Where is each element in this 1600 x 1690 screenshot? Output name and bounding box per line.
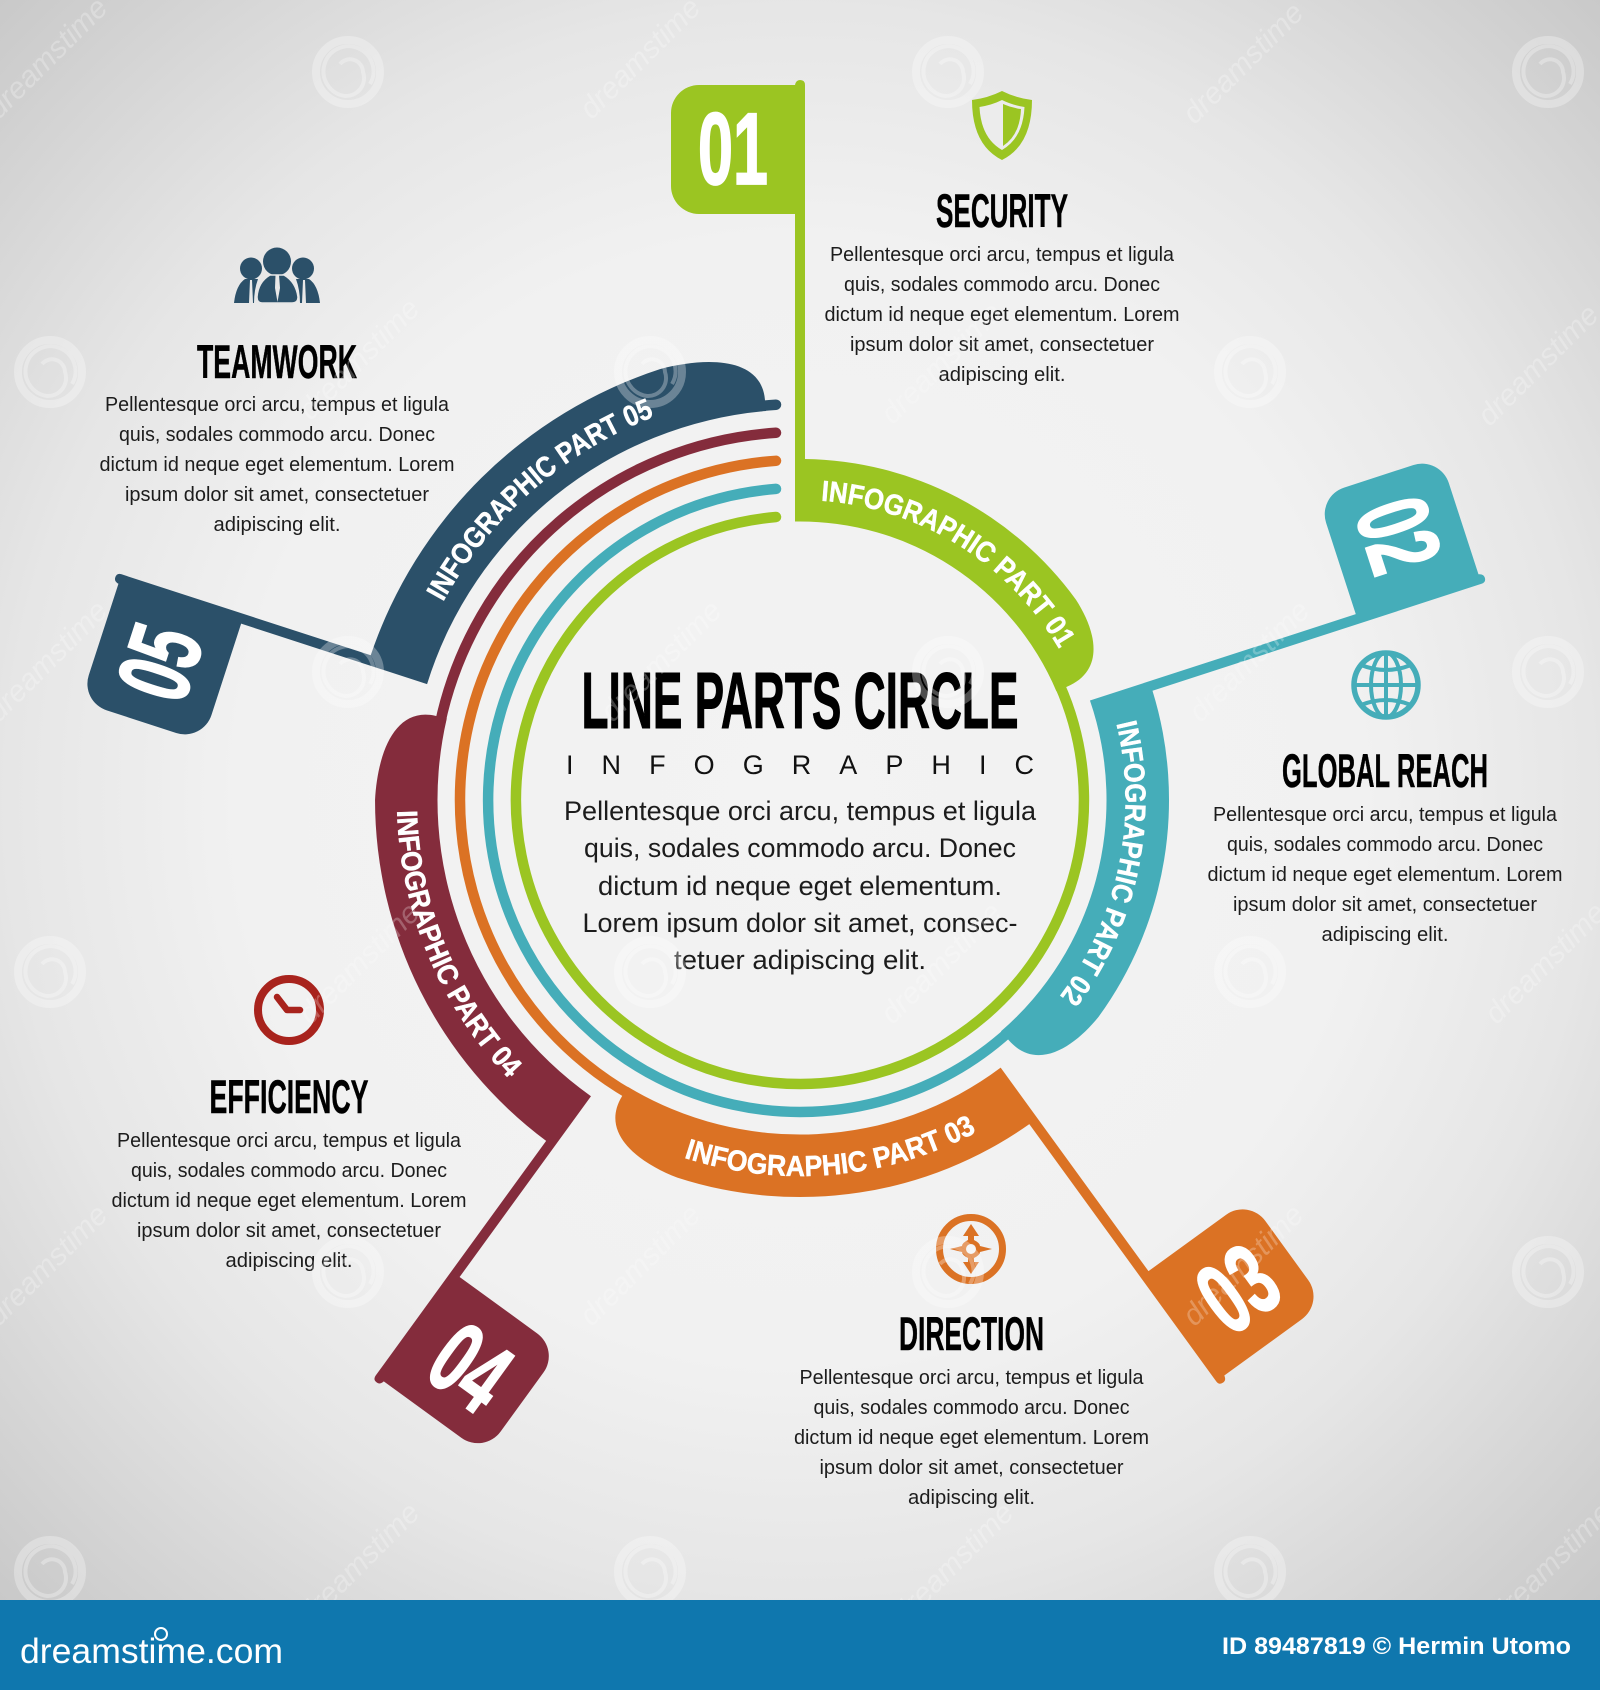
text: global reach body: Pellentesque orci arcu, tempus et ligula — [1213, 804, 1558, 826]
watermark text: dreamstime — [594, 594, 728, 728]
flag and arc band 02 — [874, 455, 1583, 1066]
text: security body — [824, 244, 1180, 386]
text: central body — [564, 796, 1037, 975]
icon: shield — [972, 91, 1032, 160]
panel: part 01 security — [671, 80, 1180, 692]
text: efficiency body: adipiscing elit. — [226, 1250, 352, 1272]
icon: team — [234, 248, 320, 303]
text: direction body: dictum id neque eget elementum. Lorem — [794, 1427, 1149, 1449]
heading: direction: DIRECTION — [899, 1307, 1044, 1360]
concentric ring lines — [440, 405, 1084, 1112]
text: central body: tetuer adipiscing elit. — [674, 945, 926, 975]
text: teamwork body: ipsum dolor sit amet, consectetuer — [125, 484, 429, 506]
flag and arc band 03 — [599, 830, 1328, 1584]
panel: part 04 efficiency — [112, 714, 591, 1444]
icon: compass — [940, 1218, 1002, 1280]
text: global reach body: ipsum dolor sit amet, consectetuer — [1233, 894, 1537, 916]
watermark text: dreamstime — [874, 896, 1008, 1030]
watermark text: dreamstime — [1176, 1198, 1310, 1332]
text: teamwork body — [100, 394, 454, 536]
ring: teal — [488, 489, 1009, 1112]
panel: part 05 teamwork — [87, 248, 766, 734]
ring: orange — [460, 461, 776, 1094]
panel: part 03 direction — [615, 1068, 1314, 1509]
footer logo: dreamstime.com — [20, 1632, 283, 1671]
icon: clock — [258, 979, 320, 1041]
text: central body: quis, sodales commodo arcu. Donec — [584, 833, 1016, 863]
watermark text: dreamstime — [874, 296, 1008, 430]
heading: security: SECURITY — [936, 184, 1068, 237]
text: direction body: quis, sodales commodo arcu. Donec — [814, 1397, 1130, 1419]
text: efficiency body: Pellentesque orci arcu, tempus et ligula — [117, 1130, 462, 1152]
title: LINE PARTS CIRCLE — [582, 656, 1018, 745]
text: efficiency body: ipsum dolor sit amet, consectetuer — [137, 1220, 441, 1242]
text: teamwork body: dictum id neque eget elementum. Lorem — [100, 454, 454, 476]
text: direction body — [794, 1367, 1149, 1509]
text: global reach body: dictum id neque eget elementum. Lorem — [1208, 864, 1562, 886]
footer bar — [0, 1600, 1600, 1690]
text: security body: adipiscing elit. — [938, 364, 1066, 386]
text: central body: Pellentesque orci arcu, tempus et ligula — [564, 796, 1037, 826]
text: security body: Pellentesque orci arcu, tempus et ligula — [830, 244, 1175, 266]
footer credit: ID 89487819 © Hermin Utomo — [1222, 1633, 1571, 1660]
text: global reach body — [1208, 804, 1562, 946]
watermark text: dreamstime — [1176, 0, 1310, 130]
title block — [564, 656, 1037, 975]
text: efficiency body: quis, sodales commodo arcu. Donec — [131, 1160, 447, 1182]
watermark text: dreamstime — [292, 896, 426, 1030]
text: teamwork body: Pellentesque orci arcu, tempus et ligula — [105, 394, 450, 416]
text: efficiency body — [112, 1130, 466, 1272]
flag and arc band 04 — [79, 698, 821, 1458]
ring: maroon — [440, 433, 776, 724]
flag and arc band 01 — [671, 80, 1094, 691]
ring: green — [516, 517, 1084, 1084]
text: teamwork body: adipiscing elit. — [214, 514, 340, 536]
text: global reach body: adipiscing elit. — [1322, 924, 1448, 946]
text: security body: quis, sodales commodo arcu. Donec — [844, 274, 1160, 296]
arc label 03: INFOGRAPHIC PART 03 — [685, 1116, 974, 1176]
text: direction body: adipiscing elit. — [908, 1487, 1035, 1509]
ring: navy — [759, 405, 776, 406]
watermark text: dreamstime — [1182, 594, 1316, 728]
number 04: 04 — [409, 1301, 532, 1434]
watermark text: dreamstime — [573, 1198, 707, 1332]
number 05: 05 — [95, 612, 225, 713]
heading: teamwork: TEAMWORK — [197, 335, 357, 388]
arc label 04: INFOGRAPHIC PART 04 — [396, 812, 522, 1078]
text: teamwork body: quis, sodales commodo arcu. Donec — [119, 424, 435, 446]
arc label 05: INFOGRAPHIC PART 05 — [426, 398, 652, 601]
text: efficiency body: dictum id neque eget elementum. Lorem — [112, 1190, 466, 1212]
panel: part 02 global reach — [1001, 464, 1562, 1056]
watermark text: dreamstime — [886, 1496, 1020, 1630]
number 02: 02 — [1333, 484, 1463, 586]
text: direction body: ipsum dolor sit amet, consectetuer — [820, 1457, 1124, 1479]
flag and arc band 05 — [75, 203, 776, 876]
text: central body: dictum id neque eget elementum. — [598, 871, 1002, 901]
text: security body: dictum id neque eget elementum. Lorem — [824, 304, 1180, 326]
text: global reach body: quis, sodales commodo arcu. Donec — [1227, 834, 1543, 856]
watermark text: dreamstime — [292, 1496, 426, 1630]
arc label 01: INFOGRAPHIC PART 01 — [822, 480, 1074, 649]
watermark text: dreamstime — [292, 292, 426, 426]
subtitle: INFOGRAPHIC — [566, 750, 1034, 780]
icon: globe — [1354, 653, 1418, 717]
arc label 02: INFOGRAPHIC PART 02 — [1060, 720, 1146, 1006]
text: direction body: Pellentesque orci arcu, tempus et ligula — [800, 1367, 1144, 1389]
number 01: 01 — [698, 92, 768, 206]
number 03: 03 — [1176, 1222, 1300, 1356]
text: security body: ipsum dolor sit amet, consectetuer — [850, 334, 1154, 356]
text: central body: Lorem ipsum dolor sit amet, consec- — [582, 908, 1018, 938]
heading: efficiency: EFFICIENCY — [210, 1070, 368, 1123]
